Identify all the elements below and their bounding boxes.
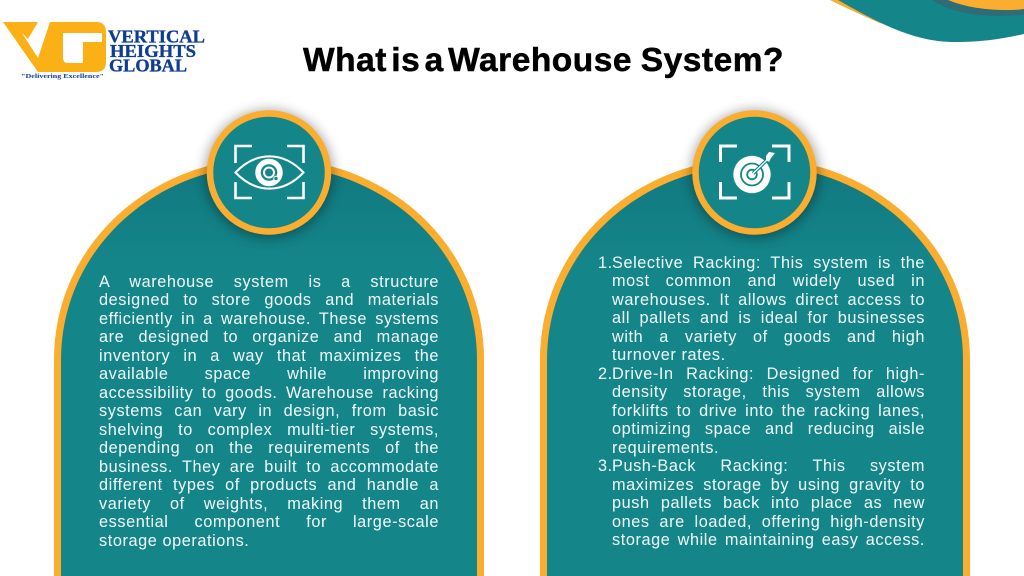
text block: racking types list: storage while maintaining easy access. [612, 531, 925, 549]
text: 2. [598, 364, 613, 382]
title: What is a Warehouse System? [303, 42, 784, 79]
icon: eye badge [205, 110, 333, 238]
text block: warehouse system definition: depending on the requirements of the [99, 439, 439, 457]
text block: warehouse system definition: inventory in a way that maximizes the [99, 346, 439, 364]
text: 3. [598, 457, 613, 475]
text block: warehouse system definition: A warehouse system is a structure [99, 272, 439, 290]
text block: warehouse system definition: essential component for large-scale [99, 513, 439, 531]
text block: racking types list: maximizes storage by using gravity to [612, 476, 925, 494]
text block: warehouse system definition: storage operations. [99, 532, 249, 550]
text block: racking types list: turnover rates. [612, 346, 726, 364]
corner decoration [830, 0, 1024, 42]
logo text: name: VERTICAL [108, 26, 205, 46]
text block: racking types list: density storage, this system allows [612, 383, 925, 401]
text block: racking types list: Selective Racking: This system is the [612, 254, 925, 272]
logo tagline: "Delivering Excellence" [21, 73, 104, 80]
logo text: name: GLOBAL [109, 56, 187, 76]
logo: Vertical Heights Global [3, 22, 205, 80]
text block: racking types list: warehouses. It allows direct access to [612, 290, 925, 308]
text block: racking types list: Push-Back Racking: This system [612, 457, 925, 475]
icon: target badge [691, 110, 819, 238]
panel: right arch [540, 158, 970, 576]
logo mark: VG [3, 22, 106, 72]
text block: warehouse system definition: different types of products and handle a [99, 476, 439, 494]
text block: warehouse system definition: available space while improving [99, 365, 439, 383]
logo text: name [108, 26, 205, 76]
text block: racking types list: forklifts to drive into the racking lanes, [612, 402, 925, 420]
logo text: name: HEIGHTS [110, 41, 196, 61]
text block: warehouse system definition: systems can vary in design, from basic [99, 402, 439, 420]
text block: warehouse system definition: accessibility to goods. Warehouse racking [99, 384, 439, 402]
text block: warehouse system definition: efficiently in a warehouse. These systems [99, 310, 439, 328]
text block: racking types list: requirements. [612, 438, 719, 456]
text block: racking types list: all pallets and is ideal for businesses [612, 309, 925, 327]
text: 1. [598, 254, 613, 272]
text block: warehouse system definition: business. They are built to accommodate [99, 458, 439, 476]
text block: racking types list: ones are loaded, offering high-density [612, 512, 925, 530]
panel: left arch [54, 158, 484, 576]
text block: warehouse system definition: are designed to organize and manage [99, 328, 439, 346]
text block: racking types list: push pallets back into place as new [612, 494, 925, 512]
text block: racking types list: most common and widely used in [612, 272, 925, 290]
text block: racking types list [598, 254, 925, 549]
text block: racking types list: with a variety of goods and high [612, 328, 925, 346]
text block: warehouse system definition: variety of weights, making them an [99, 494, 439, 512]
text block: warehouse system definition: shelving to complex multi-tier systems, [99, 420, 439, 438]
text block: warehouse system definition: designed to store goods and materials [99, 291, 439, 309]
text block: racking types list: Drive-In Racking: Designed for high- [612, 364, 925, 382]
text block: racking types list: optimizing space and reducing aisle [612, 420, 925, 438]
text block: warehouse system definition [99, 272, 439, 550]
